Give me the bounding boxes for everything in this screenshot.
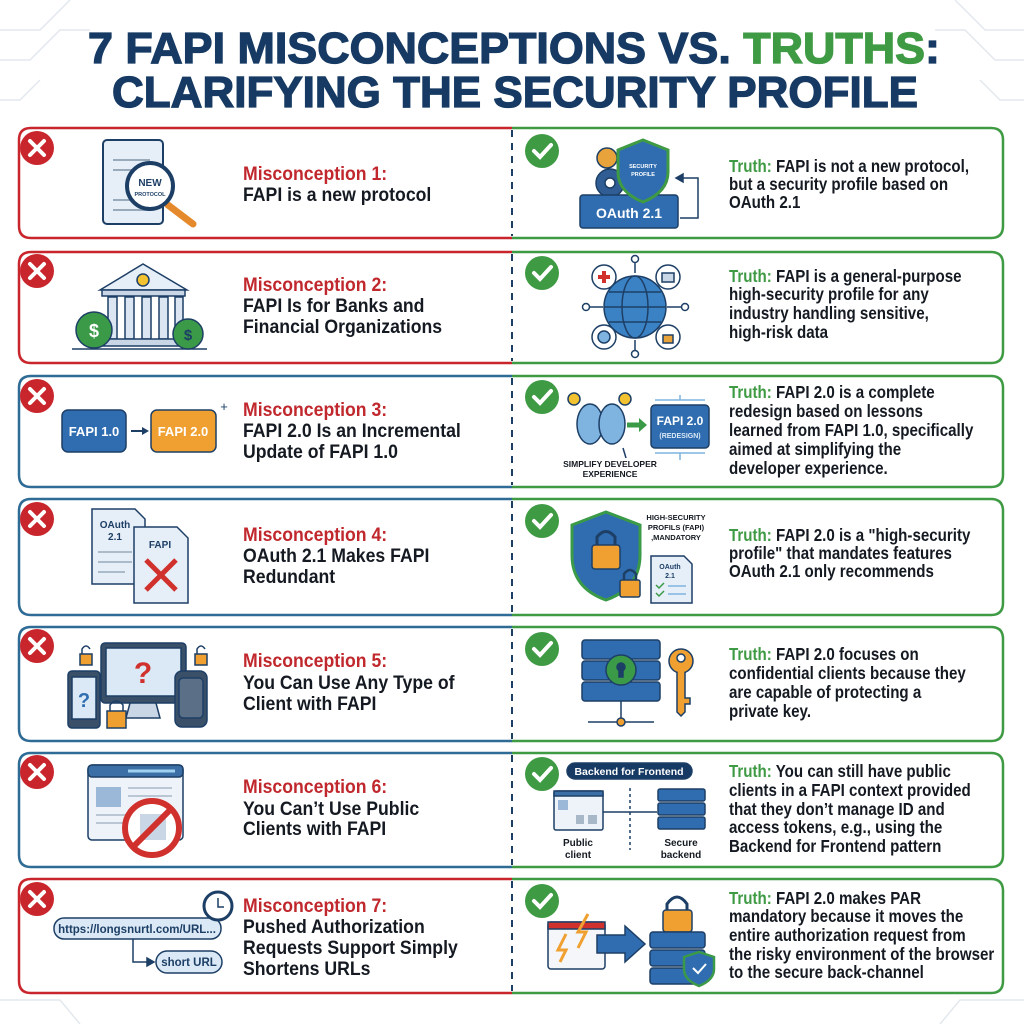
text: misconception 5: [243, 649, 455, 714]
row 3: [19, 376, 1003, 487]
icon: long URL shortened: short URL: [161, 957, 217, 969]
icon: red x badge: [20, 882, 54, 916]
icon: globe network: [582, 256, 688, 358]
icon: green check badge: [525, 757, 559, 791]
text: truth 4: profile" that mandates features: [729, 543, 952, 563]
icon: green check badge: [525, 380, 559, 414]
icon: OAuth and FAPI documents: FAPI: [149, 540, 171, 551]
text: misconception 4: OAuth 2.1 Makes FAPI: [243, 544, 429, 566]
text: truth 7: mandatory because it moves the: [729, 906, 963, 926]
icon: brain to FAPI 2.0 redesign: [563, 393, 709, 479]
text: misconception 6: You Can’t Use Public: [243, 797, 419, 819]
panel: truth 7: [512, 879, 1003, 993]
panel: truth 2: [512, 252, 1003, 363]
text: misconception 7: Pushed Authorization: [243, 915, 425, 937]
icon: backend for frontend diagram: Public: [563, 838, 593, 849]
title: 7 FAPI MISCONCEPTIONS VS. TRUTHS:: [88, 24, 940, 73]
text: truth 1: Truth: FAPI is not a new protocol,: [729, 156, 969, 176]
icon: backend for frontend diagram: client: [565, 850, 592, 861]
icon: OAuth and FAPI documents: [92, 509, 188, 603]
icon: green check badge: [525, 632, 559, 666]
text: truth 6: [729, 761, 971, 856]
icon: FAPI 1.0 to 2.0: [62, 399, 228, 452]
text: misconception 7: Shortens URLs: [243, 957, 371, 979]
row 6: [19, 753, 1003, 867]
icon: FAPI 1.0 to 2.0: +: [220, 399, 228, 414]
icon: brain to FAPI 2.0 redesign: FAPI 2.0: [657, 414, 704, 428]
text: misconception 6: Clients with FAPI: [243, 817, 386, 839]
text: truth 3: redesign based on lessons: [729, 401, 923, 421]
text: misconception 2: FAPI Is for Banks and: [243, 294, 424, 316]
icon: backend for frontend diagram: Backend for Frontend: [574, 766, 684, 778]
icon: green check badge: [525, 256, 559, 290]
text: truth 3: [729, 382, 974, 478]
text: misconception 2: Misconception 2:: [243, 273, 387, 295]
icon: shield with lock and checklist: 2.1: [665, 573, 675, 580]
icon: scroll with magnifier: NEW: [138, 178, 162, 189]
icon: backend for frontend diagram: [554, 763, 705, 861]
text: truth 4: OAuth 2.1 only recommends: [729, 561, 934, 581]
text: misconception 2: [243, 273, 442, 337]
text: misconception 5: Client with FAPI: [243, 692, 376, 714]
text: truth 2: [729, 266, 962, 342]
icon: green check badge: [525, 134, 559, 168]
icon: red x badge: [20, 131, 54, 165]
text: truth 3: learned from FAPI 1.0, specifically: [729, 420, 974, 440]
text: misconception 7: [243, 894, 459, 979]
text: truth 6: Truth: You can still have public: [729, 761, 951, 781]
title: [88, 24, 940, 117]
row 1: [19, 128, 1003, 238]
text: truth 7: the risky environment of the browser: [729, 944, 995, 964]
text: misconception 1: [243, 162, 431, 205]
text: misconception 3: FAPI 2.0 Is an Incremental: [243, 419, 461, 441]
text: truth 6: access tokens, e.g., using the: [729, 817, 942, 837]
icon: shield with lock and checklist: [572, 512, 706, 603]
text: misconception 4: [243, 523, 429, 587]
icon: red x badge: [20, 254, 54, 288]
text: misconception 6: [243, 775, 419, 839]
text: misconception 3: Misconception 3:: [243, 398, 387, 420]
text: truth 3: Truth: FAPI 2.0 is a complete: [729, 382, 935, 402]
icon: backend for frontend diagram: Secure: [664, 838, 698, 849]
text: truth 1: but a security profile based on: [729, 174, 948, 194]
panel: truth 4: [512, 499, 1003, 615]
text: truth 6: Backend for Frontend pattern: [729, 836, 941, 856]
panel: misconception 2: [19, 252, 512, 363]
panel: misconception 6: [19, 753, 512, 867]
panel: misconception 1: [19, 128, 512, 238]
icon: red x badge: [20, 755, 54, 789]
text: truth 7: [729, 888, 995, 982]
icon: bank with money bags: [72, 264, 207, 349]
text: truth 1: [729, 156, 969, 212]
icon: brain to FAPI 2.0 redesign: SIMPLIFY DEVELOPER: [563, 459, 657, 469]
text: misconception 1: FAPI is a new protocol: [243, 183, 431, 205]
text: truth 2: industry handling sensitive,: [729, 303, 929, 323]
panel: misconception 7: [19, 879, 512, 993]
icon: scroll with magnifier: [103, 140, 193, 224]
icon: OAuth and FAPI documents: OAuth: [100, 520, 130, 531]
icon: OAuth base with shield: [580, 140, 698, 228]
icon: shield with lock and checklist: HIGH-SECURITY: [646, 513, 706, 522]
icon: various client devices: ?: [134, 657, 152, 690]
text: misconception 3: [243, 398, 461, 462]
panel: truth 3: [512, 376, 1003, 487]
text: truth 7: to the secure back-channel: [729, 962, 924, 982]
text: truth 6: that they don’t manage ID and: [729, 799, 945, 819]
text: misconception 3: Update of FAPI 1.0: [243, 440, 398, 462]
icon: browser with prohibition sign: [88, 765, 183, 855]
icon: various client devices: ?: [78, 690, 90, 712]
text: truth 2: Truth: FAPI is a general-purpose: [729, 266, 962, 286]
text: truth 6: clients in a FAPI context provided: [729, 780, 971, 800]
text: truth 2: high-risk data: [729, 322, 829, 342]
icon: shield with lock and checklist: PROFILS (FAPI): [648, 523, 705, 532]
row 4: [19, 499, 1003, 615]
text: truth 5: are capable of protecting a: [729, 682, 922, 702]
row 7: [19, 879, 1003, 993]
text: truth 4: [729, 525, 971, 581]
text: misconception 2: Financial Organizations: [243, 315, 442, 337]
text: truth 7: entire authorization request from: [729, 925, 966, 945]
icon: backend for frontend diagram: backend: [661, 850, 701, 861]
text: misconception 7: Requests Support Simply: [243, 936, 459, 958]
icon: bank with money bags: $: [184, 327, 193, 344]
icon: bank with money bags: $: [89, 321, 99, 341]
panel: truth 5: [512, 627, 1003, 741]
icon: long URL shortened: [54, 892, 232, 973]
icon: locked server and key: [582, 640, 693, 726]
icon: FAPI 1.0 to 2.0: FAPI 2.0: [158, 424, 208, 439]
panel: misconception 4: [19, 499, 512, 615]
text: misconception 6: Misconception 6:: [243, 775, 387, 797]
text: truth 5: private key.: [729, 701, 811, 721]
text: misconception 4: Misconception 4:: [243, 523, 387, 545]
text: truth 3: aimed at simplifying the: [729, 439, 901, 459]
icon: green check badge: [525, 504, 559, 538]
text: misconception 1: Misconception 1:: [243, 162, 387, 184]
icon: shield with lock and checklist: ,MANDATORY: [651, 533, 701, 542]
icon: red x badge: [20, 502, 54, 536]
icon: red x badge: [20, 629, 54, 663]
panel: misconception 3: [19, 376, 512, 487]
title: CLARIFYING THE SECURITY PROFILE: [112, 68, 918, 117]
panel: truth 6: [512, 753, 1003, 867]
text: misconception 5: Misconception 5:: [243, 649, 387, 671]
text: truth 3: developer experience.: [729, 458, 888, 478]
icon: long URL shortened: https://longsnurtl.com/URL...: [58, 924, 216, 936]
text: misconception 7: Misconception 7:: [243, 894, 387, 916]
icon: brain to FAPI 2.0 redesign: EXPERIENCE: [583, 469, 638, 479]
text: truth 1: OAuth 2.1: [729, 192, 800, 212]
text: misconception 4: Redundant: [243, 565, 335, 587]
panel: misconception 5: [19, 627, 512, 741]
icon: OAuth base with shield: OAuth 2.1: [596, 205, 662, 221]
icon: OAuth and FAPI documents: 2.1: [108, 532, 122, 543]
icon: brain to FAPI 2.0 redesign: (REDESIGN): [659, 433, 701, 440]
text: truth 5: confidential clients because they: [729, 663, 966, 683]
text: truth 4: Truth: FAPI 2.0 is a "high-security: [729, 525, 971, 545]
row 2: [19, 252, 1003, 363]
icon: scroll with magnifier: PROTOCOL: [134, 192, 166, 198]
icon: OAuth base with shield: SECURITY: [629, 164, 657, 170]
icon: green check badge: [525, 884, 559, 918]
text: truth 2: high-security profile for any: [729, 284, 929, 304]
icon: browser to secure back-channel: [548, 897, 714, 986]
text: truth 5: Truth: FAPI 2.0 focuses on: [729, 644, 919, 664]
text: truth 7: Truth: FAPI 2.0 makes PAR: [729, 888, 921, 908]
panel: truth 1: [512, 128, 1003, 238]
row 5: [19, 627, 1003, 741]
icon: various client devices: [68, 643, 207, 728]
text: truth 5: [729, 644, 966, 721]
icon: red x badge: [20, 379, 54, 413]
icon: OAuth base with shield: PROFILE: [631, 172, 655, 178]
icon: FAPI 1.0 to 2.0: FAPI 1.0: [69, 424, 119, 439]
text: misconception 5: You Can Use Any Type of: [243, 671, 455, 693]
icon: shield with lock and checklist: OAuth: [659, 564, 681, 571]
